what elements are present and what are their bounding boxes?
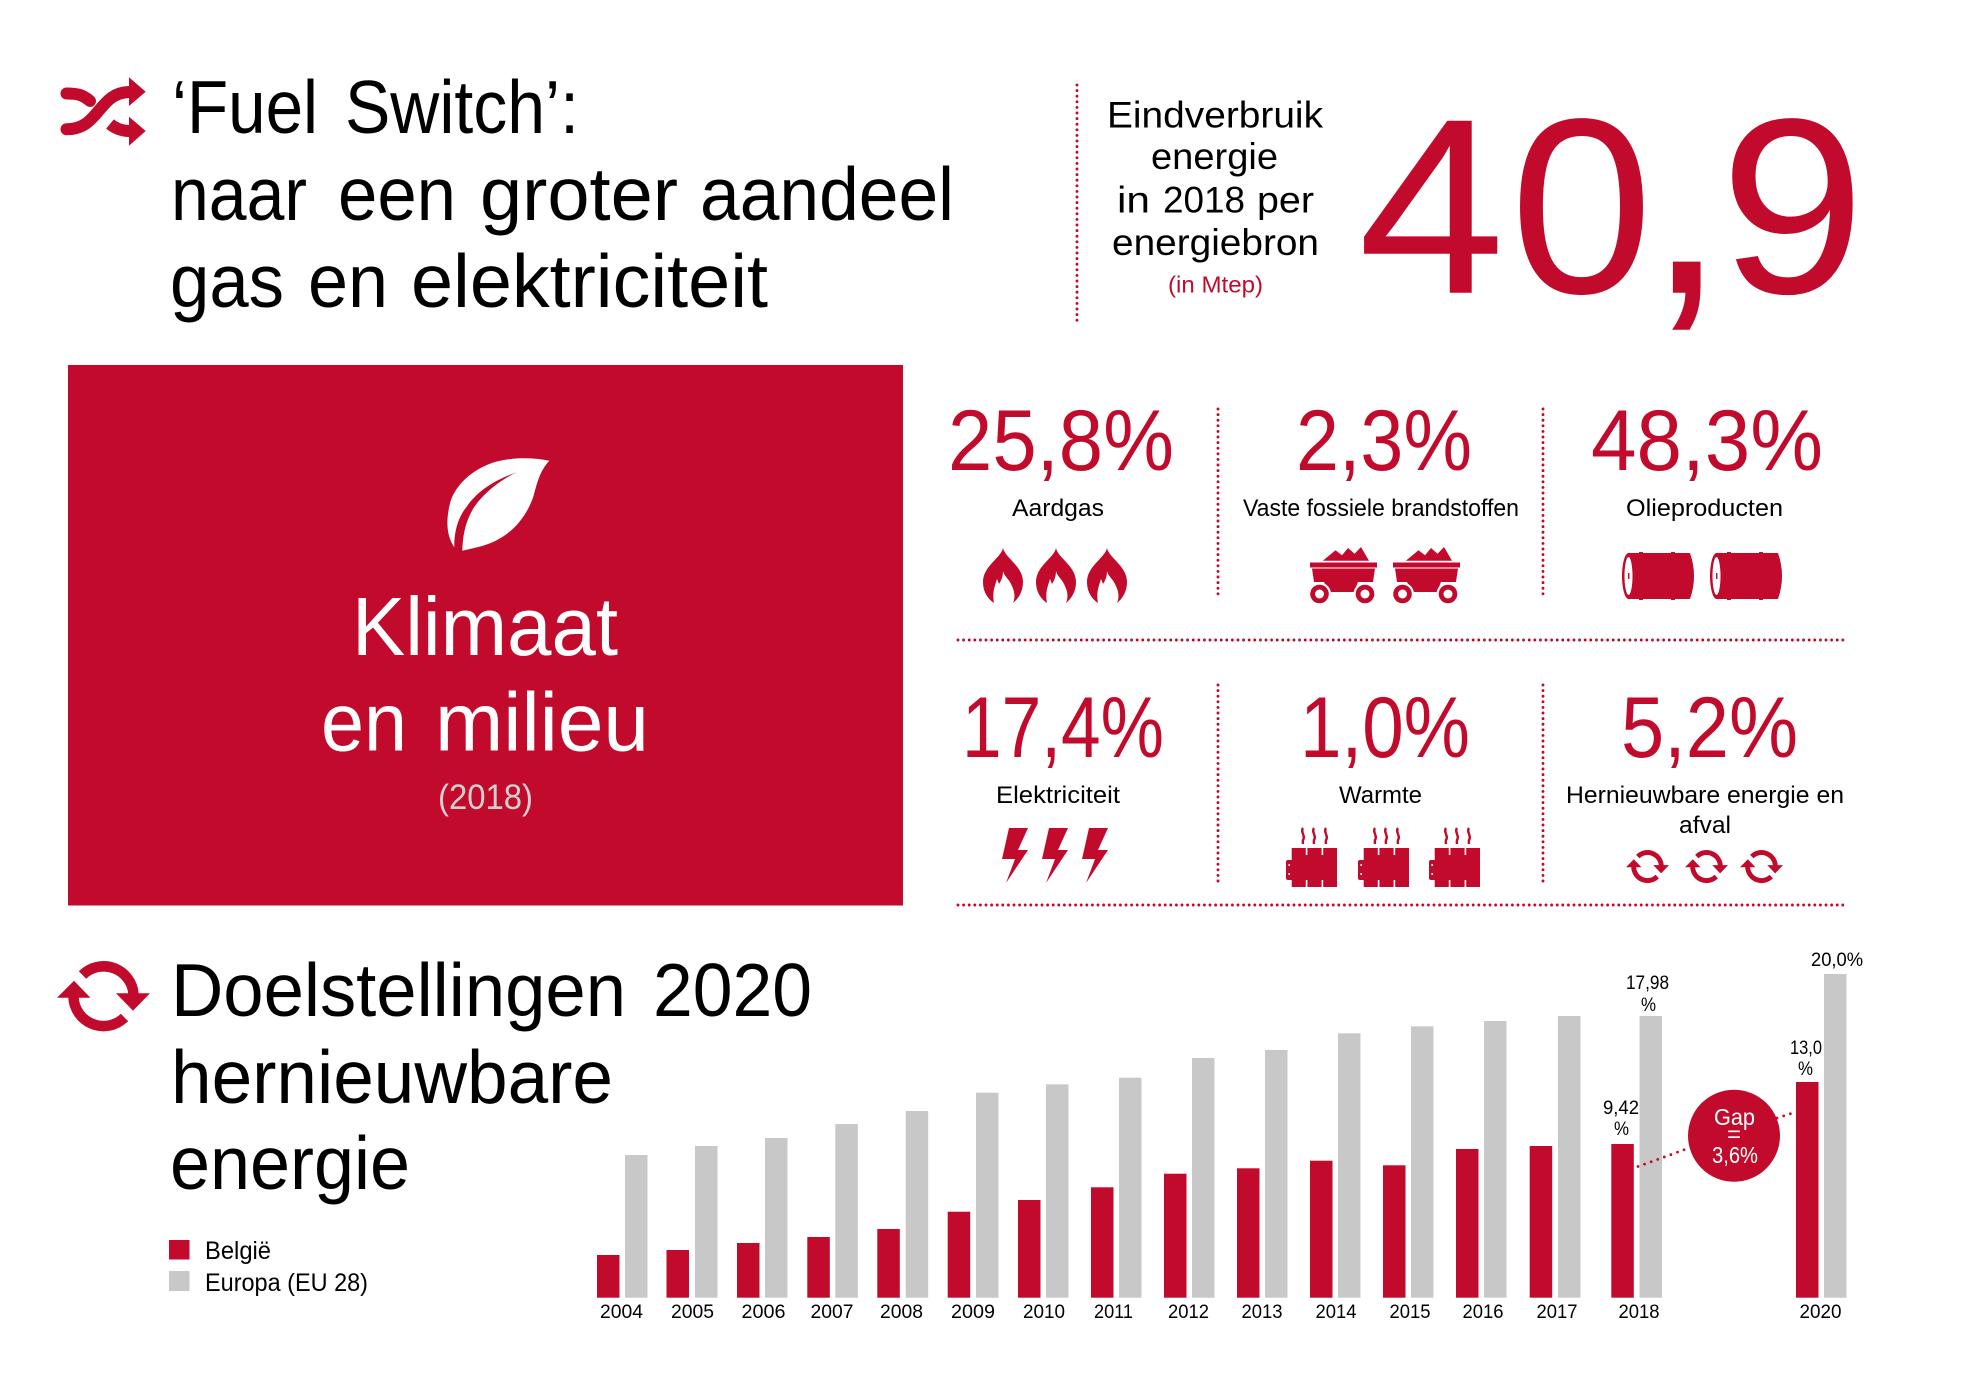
stat: Olieproducten: Olieproducten [1626, 495, 1783, 522]
text block: Eindverbruik energie [1107, 94, 1324, 298]
stat: Aardgas: Aardgas [1012, 495, 1104, 522]
stat: Warmte [1286, 680, 1480, 887]
year labels: 2014 [1316, 1302, 1357, 1323]
heading: Klimaat en milieu: Klimaat [352, 580, 618, 673]
year labels: 2010 [1023, 1302, 1065, 1323]
big number 40,9: 9 [1720, 67, 1865, 346]
year labels: 2011 [1094, 1302, 1133, 1323]
title: Doelstellingen 2020: Doelstellingen [171, 948, 626, 1032]
year labels: 2005 [671, 1302, 714, 1323]
stat: Hernieuwbare energie en afval: Hernieuwbare energie en [1566, 782, 1844, 809]
value labels: % [1614, 1119, 1629, 1140]
legend [169, 1237, 368, 1297]
text block: Eindverbruik energie: 2018 [1163, 180, 1245, 221]
title: Fuel Switch: naar [171, 152, 307, 236]
title: Fuel Switch: aandeel [700, 152, 954, 236]
value labels [1603, 950, 1863, 1140]
icon: leaf [447, 458, 549, 551]
icon: renewable cycle [57, 966, 150, 1026]
text block: Eindverbruik energie: in [1117, 180, 1150, 221]
year labels [600, 1302, 1842, 1323]
title: Fuel Switch: Switch’: [345, 65, 579, 149]
title: Doelstellingen 2020: energie [170, 1121, 410, 1205]
callout: gap 3,6% [1638, 1090, 1796, 1182]
year labels: 2016 [1462, 1302, 1504, 1323]
bars: Europa [625, 974, 1846, 1298]
value labels: 17,98 [1626, 973, 1669, 994]
year labels: 2013 [1242, 1302, 1282, 1323]
stat: Olieproducten: 48,3% [1591, 393, 1823, 489]
year label: (2018) [438, 778, 533, 817]
value labels: 13,0 [1790, 1038, 1822, 1059]
value labels: 9,42 [1603, 1098, 1639, 1119]
big number 40,9: 4 [1358, 67, 1505, 346]
heading: Klimaat en milieu: en [321, 676, 407, 769]
stat: Warmte: Warmte [1339, 782, 1422, 809]
stat: Vaste fossiele brandstoffen [1243, 393, 1519, 606]
text block: Eindverbruik energie: energiebron [1112, 222, 1319, 263]
divider: header [1076, 85, 1078, 325]
bars: België [597, 1082, 1818, 1298]
year labels: 2020 [1800, 1302, 1842, 1323]
panel: Klimaat en milieu [68, 365, 903, 906]
stat: Vaste fossiele brandstoffen: 2,3% [1296, 393, 1472, 489]
text block: Eindverbruik energie: energie [1151, 136, 1278, 177]
text block: Eindverbruik energie: (in Mtep) [1168, 272, 1263, 298]
value labels: % [1641, 995, 1656, 1016]
big number 40,9: , [1646, 31, 1727, 355]
stat: Hernieuwbare energie en afval: 5,2% [1621, 680, 1798, 776]
dividers: stat grid [958, 409, 1846, 905]
title: Fuel Switch: en [308, 239, 388, 323]
year labels: 2015 [1390, 1302, 1430, 1323]
bar chart: België vs Europa [597, 950, 1863, 1323]
big number 40,9: 0 [1510, 67, 1653, 346]
stat: Hernieuwbare energie en afval [1566, 680, 1844, 881]
stat: Elektriciteit: 17,4% [962, 680, 1164, 776]
stat: Elektriciteit [962, 680, 1164, 883]
legend: Europa (EU 28) [205, 1269, 368, 1297]
stat: Hernieuwbare energie en afval: afval [1679, 812, 1731, 839]
icon: shuffle arrows [66, 77, 146, 146]
heading: Klimaat en milieu [321, 580, 649, 769]
heading: Klimaat en milieu: milieu [435, 676, 649, 769]
title: Fuel Switch: ‘Fuel [172, 65, 318, 149]
title: Fuel Switch: elektriciteit [411, 239, 768, 323]
callout: gap 3,6%: Gap [1714, 1104, 1755, 1130]
text block: Eindverbruik energie: Eindverbruik [1107, 94, 1324, 135]
value labels: 20,0% [1811, 950, 1863, 971]
year labels: 2006 [742, 1302, 786, 1323]
year labels: 2009 [951, 1302, 995, 1323]
year labels: 2017 [1536, 1302, 1578, 1323]
year labels: 2018 [1618, 1302, 1660, 1323]
text block: Eindverbruik energie: per [1257, 180, 1314, 221]
stat: Elektriciteit: Elektriciteit [996, 782, 1120, 809]
year labels: 2007 [810, 1302, 854, 1323]
stat: Aardgas: 25,8% [948, 393, 1174, 489]
year labels: 2004 [600, 1302, 643, 1323]
title: Fuel Switch: een [338, 152, 456, 236]
title: Fuel Switch: groter [480, 152, 678, 236]
title: Fuel Switch: gas [170, 239, 284, 323]
stat: Vaste fossiele brandstoffen: Vaste fossiele brandstoffen [1243, 495, 1519, 522]
big number 40,9 [1358, 31, 1865, 355]
title: Doelstellingen 2020: 2020 [653, 948, 812, 1032]
callout: gap 3,6%: 3,6% [1712, 1142, 1758, 1168]
stat: Aardgas [948, 393, 1174, 603]
title: Doelstellingen 2020 [170, 948, 812, 1205]
stat: Warmte: 1,0% [1300, 680, 1470, 776]
title: Doelstellingen 2020: hernieuwbare [171, 1035, 613, 1119]
title: Fuel Switch [170, 65, 954, 323]
callout: gap 3,6%: = [1727, 1121, 1741, 1147]
legend: België [205, 1237, 271, 1265]
value labels: % [1798, 1059, 1813, 1080]
year labels: 2012 [1168, 1302, 1209, 1323]
year labels: 2008 [880, 1302, 923, 1323]
stat: Olieproducten [1591, 393, 1823, 600]
